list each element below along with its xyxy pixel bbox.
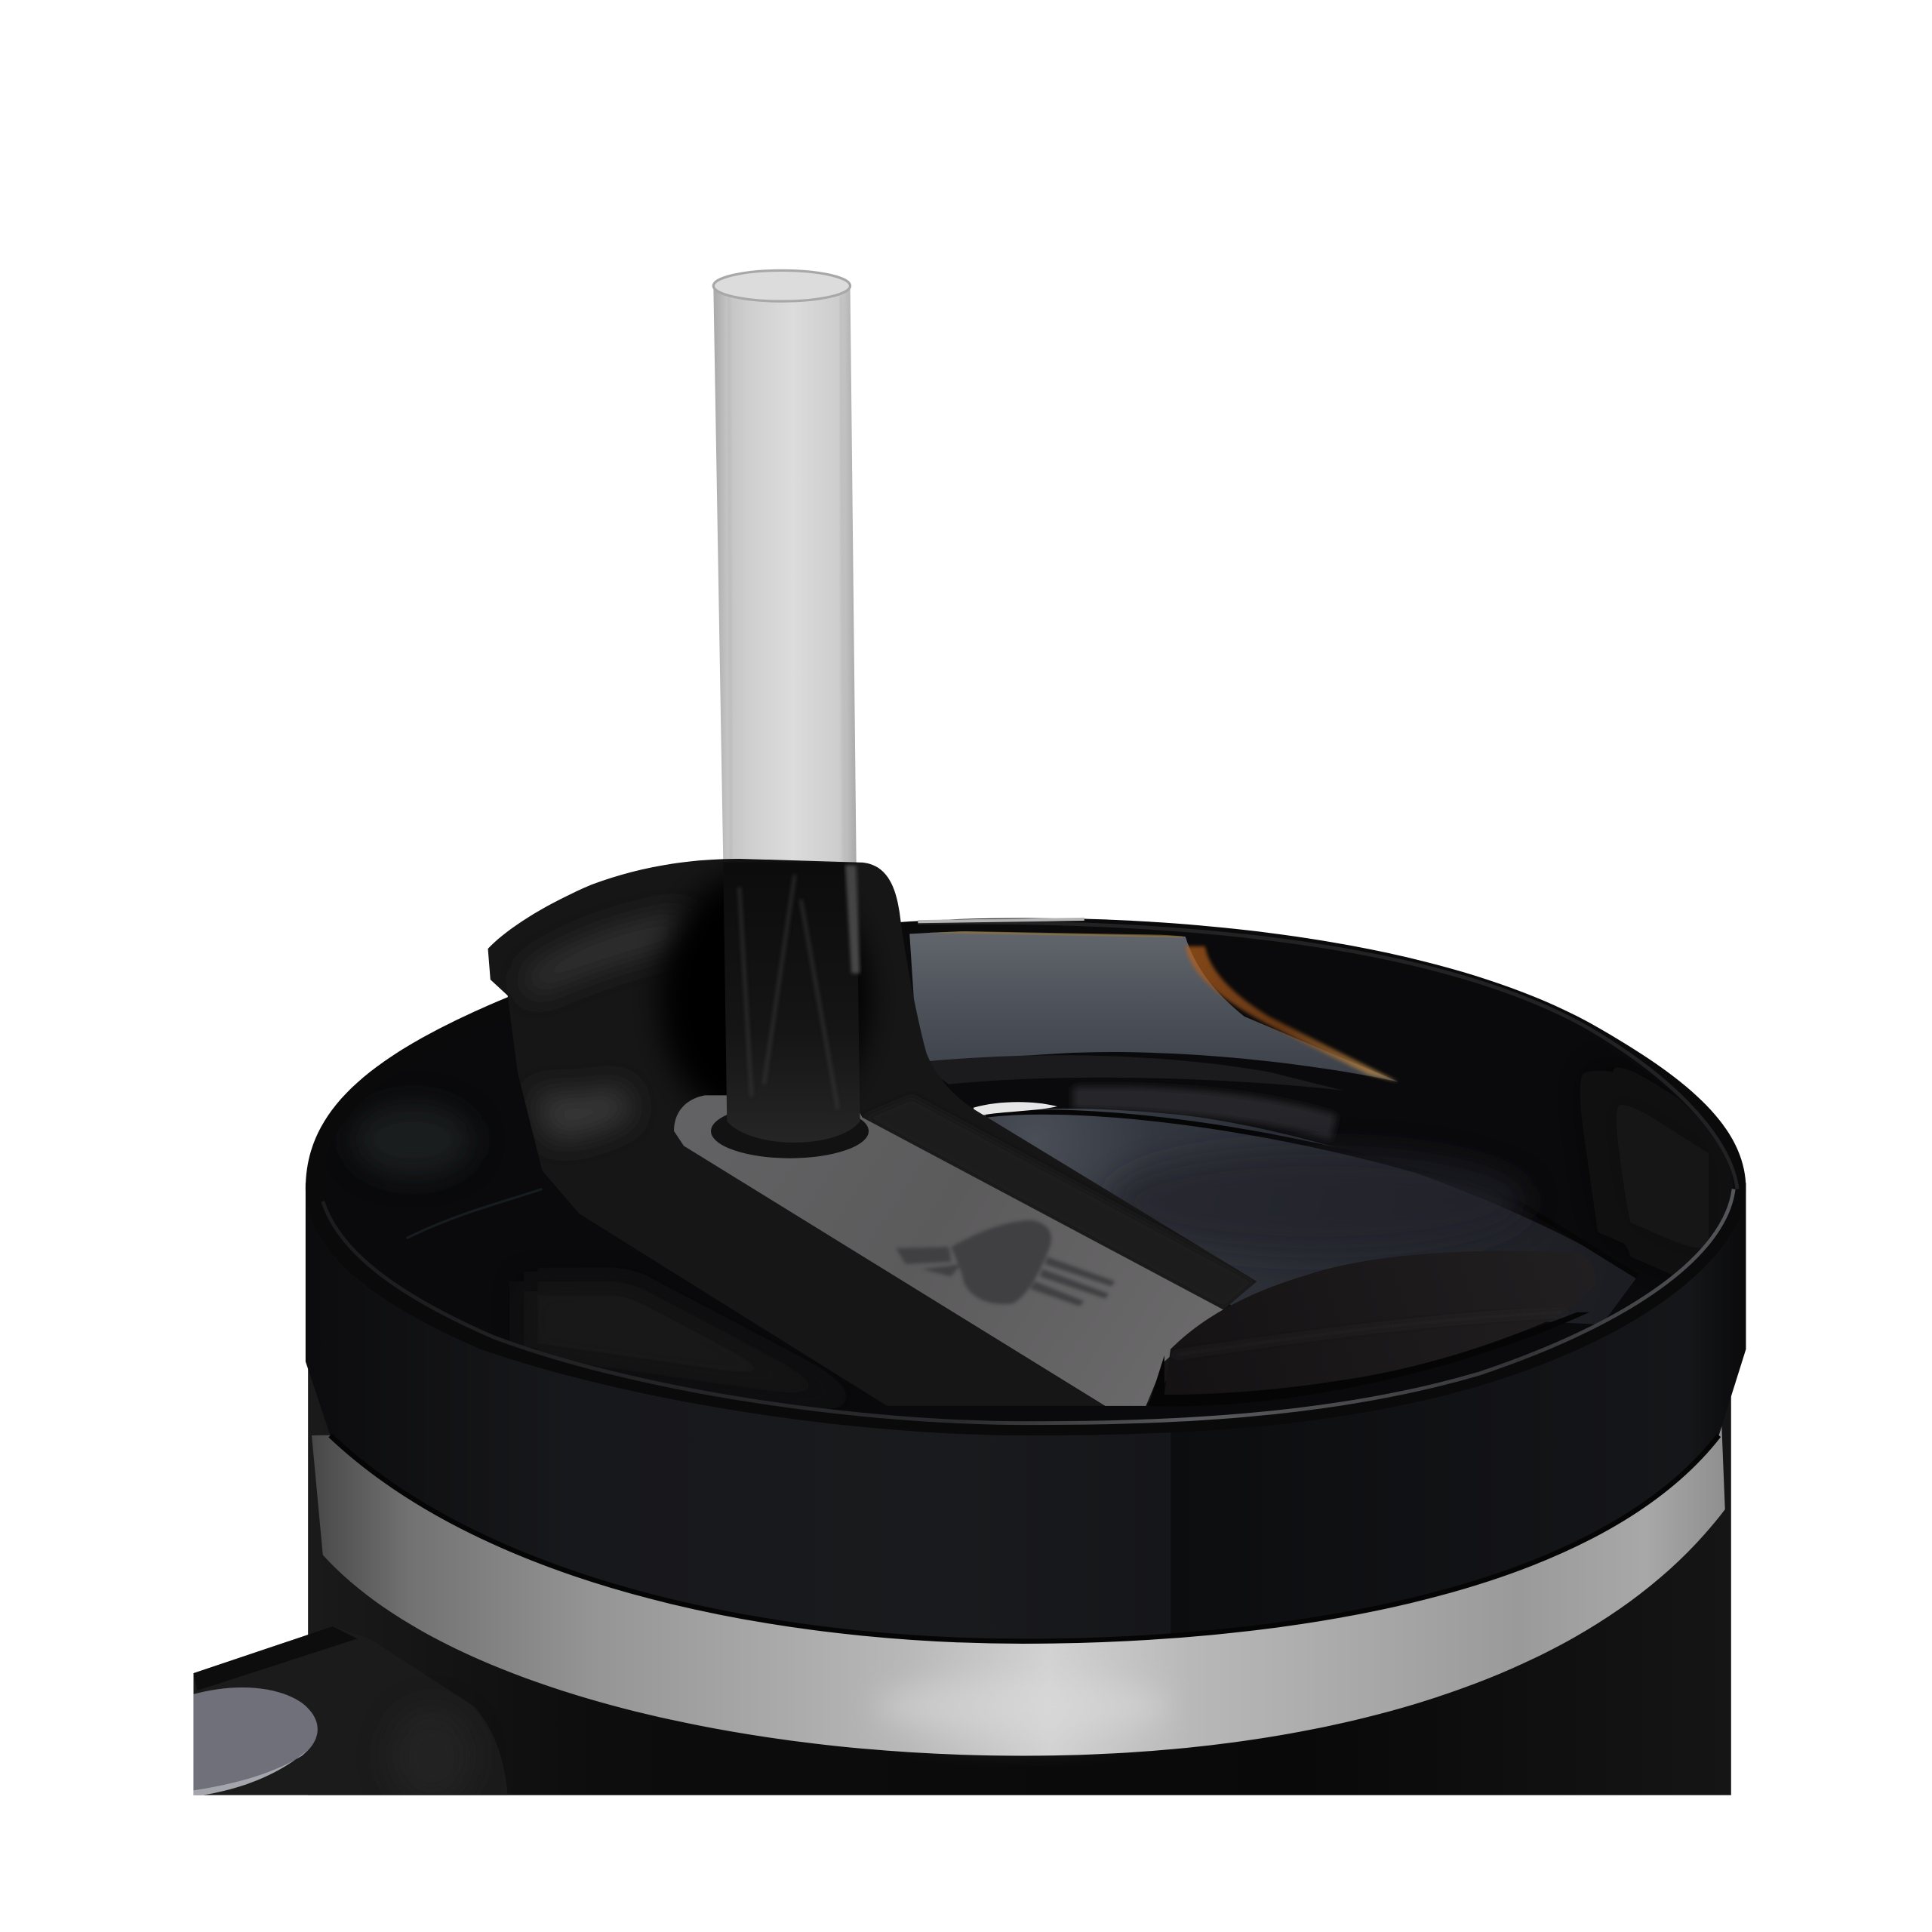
straw lower section inside lid (711, 863, 869, 1158)
straw upper section (713, 270, 857, 865)
tumbler body (193, 1369, 1731, 1795)
front interior shadow shape (524, 1281, 809, 1392)
straw top opening (713, 270, 851, 301)
flip lid cover and arm (488, 859, 1257, 1406)
rim highlight back edge (918, 922, 1737, 1189)
right inner wall (1617, 1105, 1709, 1248)
handle with grey button (193, 1626, 508, 1805)
right flip tab (1149, 1251, 1597, 1406)
rim highlight front lip (323, 1189, 1734, 1423)
lid interior (355, 931, 1709, 1392)
grey slider panel (674, 1095, 1223, 1406)
product illustration: tumbler with flip lid and straw (193, 269, 1746, 1795)
left inner wall sheen (351, 1103, 475, 1177)
bull logo (896, 1220, 1115, 1306)
back wall reflection (909, 931, 1398, 1081)
lid floor band (918, 1055, 1343, 1140)
straw hole (711, 1104, 869, 1158)
lid rim (306, 918, 1746, 1435)
stainless steel band (312, 1417, 1725, 1756)
handle button (193, 1687, 318, 1790)
lid centre disc (974, 1102, 1638, 1324)
lid outer wall (306, 1183, 1746, 1641)
